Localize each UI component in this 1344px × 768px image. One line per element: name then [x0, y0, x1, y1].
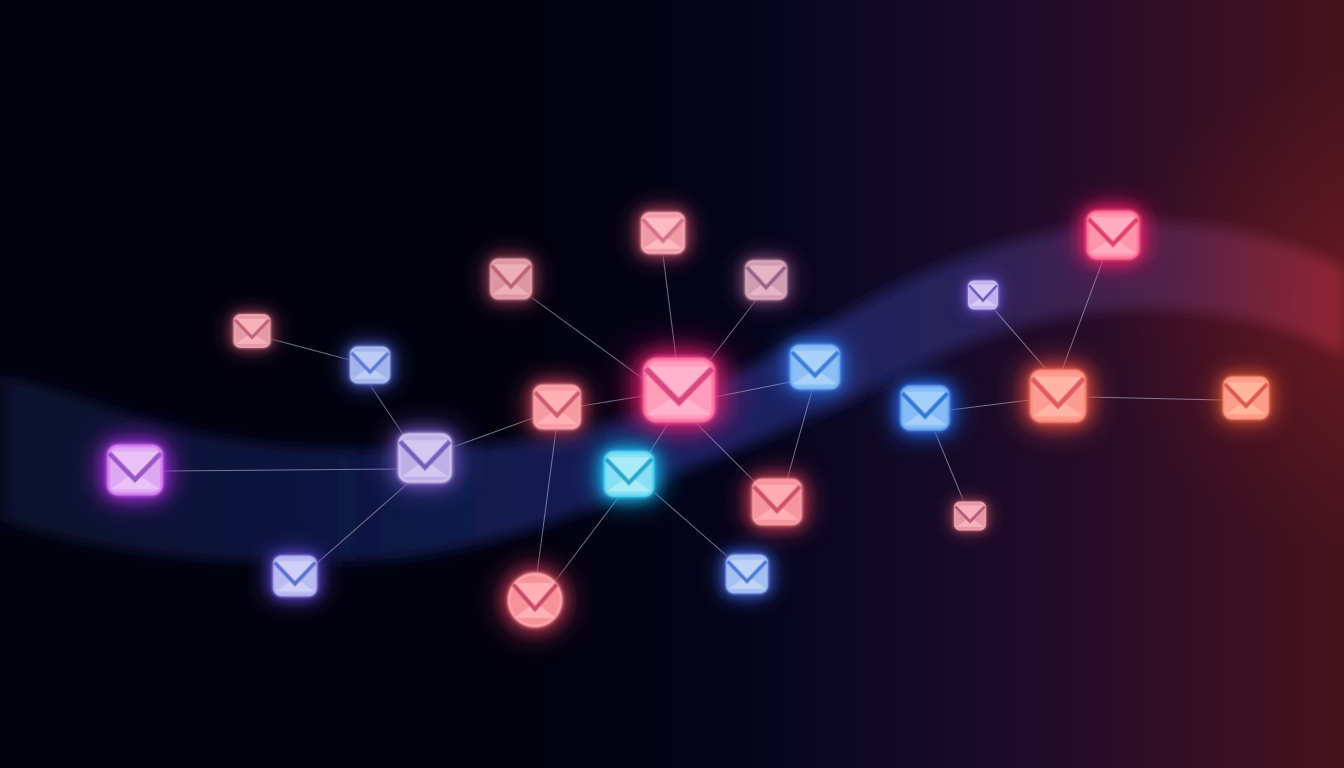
icon: email top centre	[638, 209, 688, 257]
icon: email upper left pink	[487, 256, 535, 302]
icon: email blue right cluster	[898, 383, 952, 433]
icon: email small pink	[952, 500, 988, 532]
icon: email blue lower centre	[723, 552, 771, 596]
icon: email orange salmon node	[1027, 366, 1089, 426]
icon: email cyan	[601, 448, 657, 500]
icon: email salmon left of hub	[530, 382, 584, 432]
icon: email small lavender	[966, 279, 1000, 311]
icon: email left periwinkle	[348, 344, 392, 386]
icon: email salmon lower right of hub	[749, 476, 805, 528]
icon: email blue right of hub	[787, 342, 843, 392]
icon: email circular badge	[504, 569, 566, 631]
icon: email upper right mauve	[742, 258, 790, 302]
icon: email lavender node	[395, 430, 455, 486]
icon: email hot pink top right	[1083, 208, 1143, 262]
icon: email orange far right	[1220, 374, 1272, 422]
icon: email central hub hot pink	[639, 354, 719, 426]
icon: email purple far left	[104, 441, 166, 499]
flowing ribbon band	[0, 222, 1344, 562]
icon: email far left pink	[231, 312, 273, 350]
icon: email lavender blue lower left	[270, 553, 320, 599]
connection lines	[163, 255, 1223, 580]
